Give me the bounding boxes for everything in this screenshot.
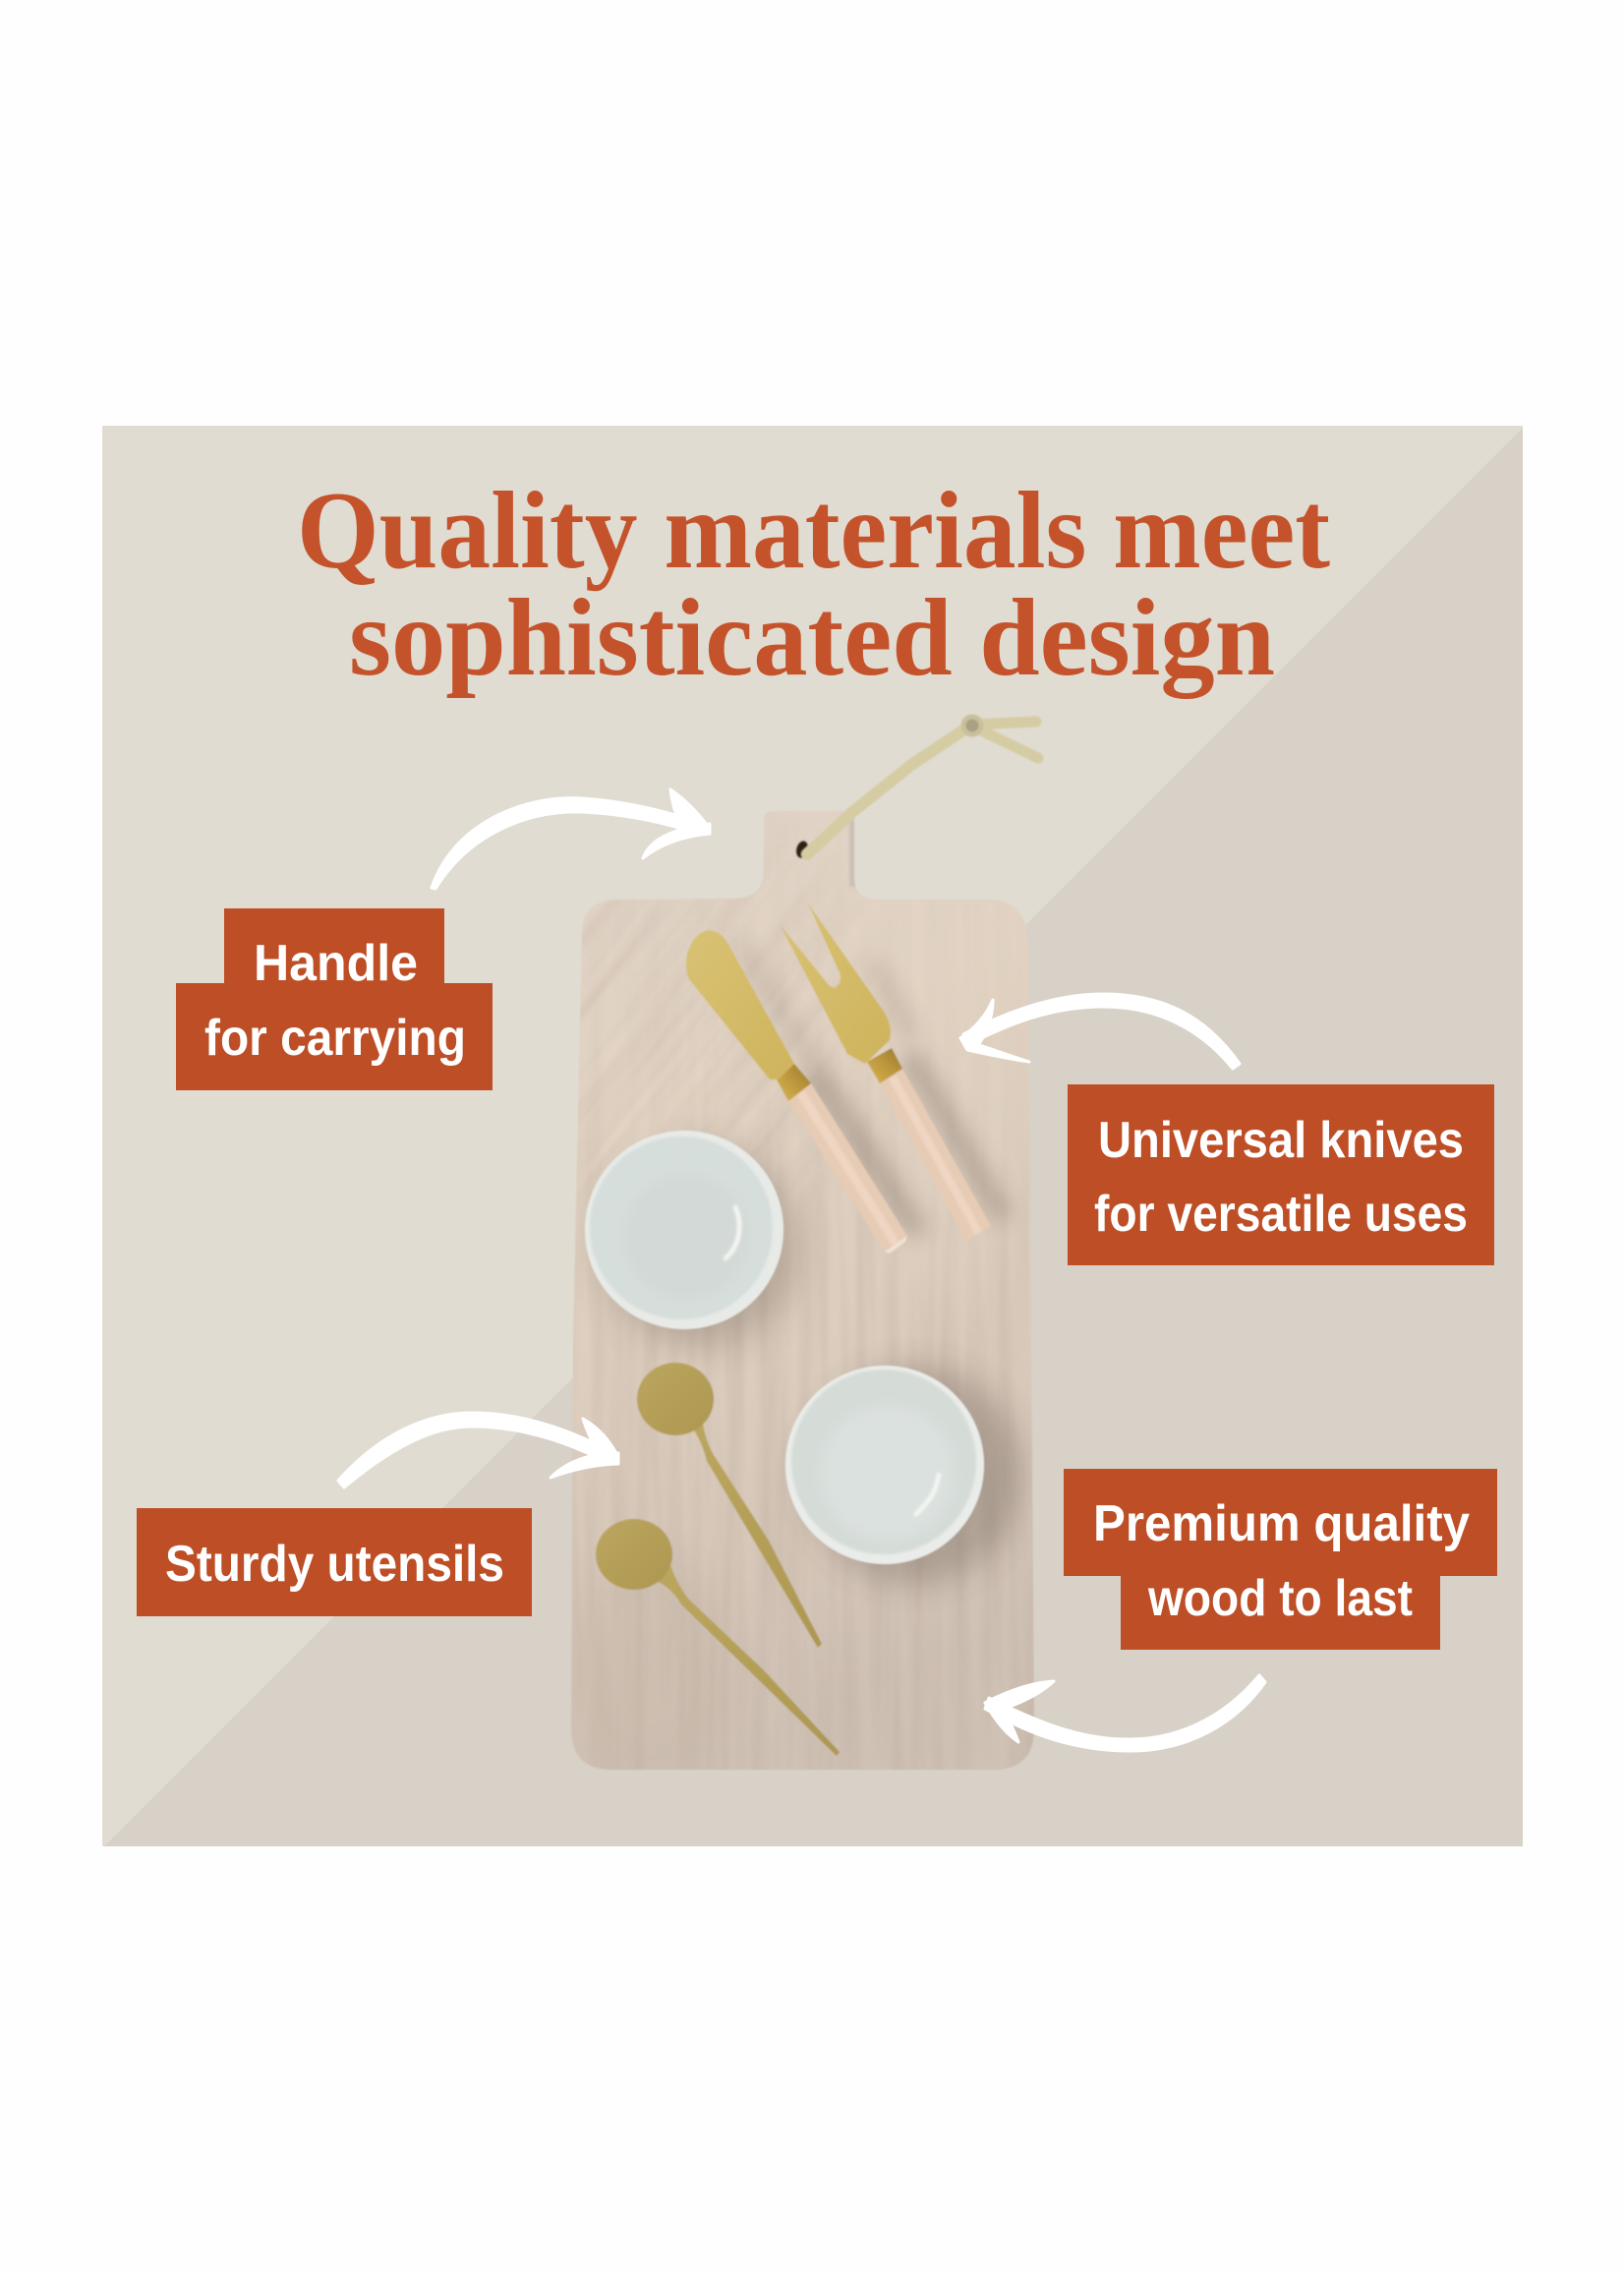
wooden board — [571, 811, 1034, 1770]
arrow: to handle — [432, 789, 710, 889]
arrow: to wood — [985, 1675, 1265, 1751]
title: Quality materials meet — [297, 470, 1330, 592]
soft shadows on the board — [601, 934, 1016, 1577]
callout: universal knives: for versatile uses — [1094, 1186, 1468, 1243]
panel: beige background — [102, 426, 1523, 1846]
cheese knife — [686, 930, 907, 1254]
callout: universal knives — [1068, 1084, 1494, 1265]
callout: sturdy utensils — [137, 1508, 532, 1616]
callout: handle: for carrying — [204, 1010, 466, 1067]
callout: premium quality wood: wood to last — [1147, 1570, 1413, 1627]
leather strap — [807, 717, 1038, 854]
callout: premium quality wood — [1064, 1469, 1497, 1650]
arrow: to utensils — [338, 1413, 618, 1487]
gold spoon upper — [637, 1363, 822, 1648]
callout: handle: Handle — [254, 935, 418, 992]
callout: sturdy utensils: Sturdy utensils — [165, 1536, 504, 1593]
cheese fork — [780, 904, 991, 1241]
white bowl right — [785, 1366, 984, 1564]
callout: universal knives: Universal knives — [1098, 1112, 1464, 1169]
arrow: to knives — [960, 994, 1240, 1069]
gold spoon lower — [596, 1519, 840, 1756]
callout: premium quality wood: Premium quality — [1093, 1495, 1470, 1552]
panel diagonal band — [104, 428, 1523, 1846]
product: cutting board with utensils and bowls — [571, 714, 1044, 1770]
white bowl left — [585, 1131, 783, 1329]
title: sophisticated design — [349, 577, 1275, 699]
title — [297, 470, 1330, 699]
hole in handle — [794, 840, 810, 859]
callout: handle — [176, 908, 493, 1090]
